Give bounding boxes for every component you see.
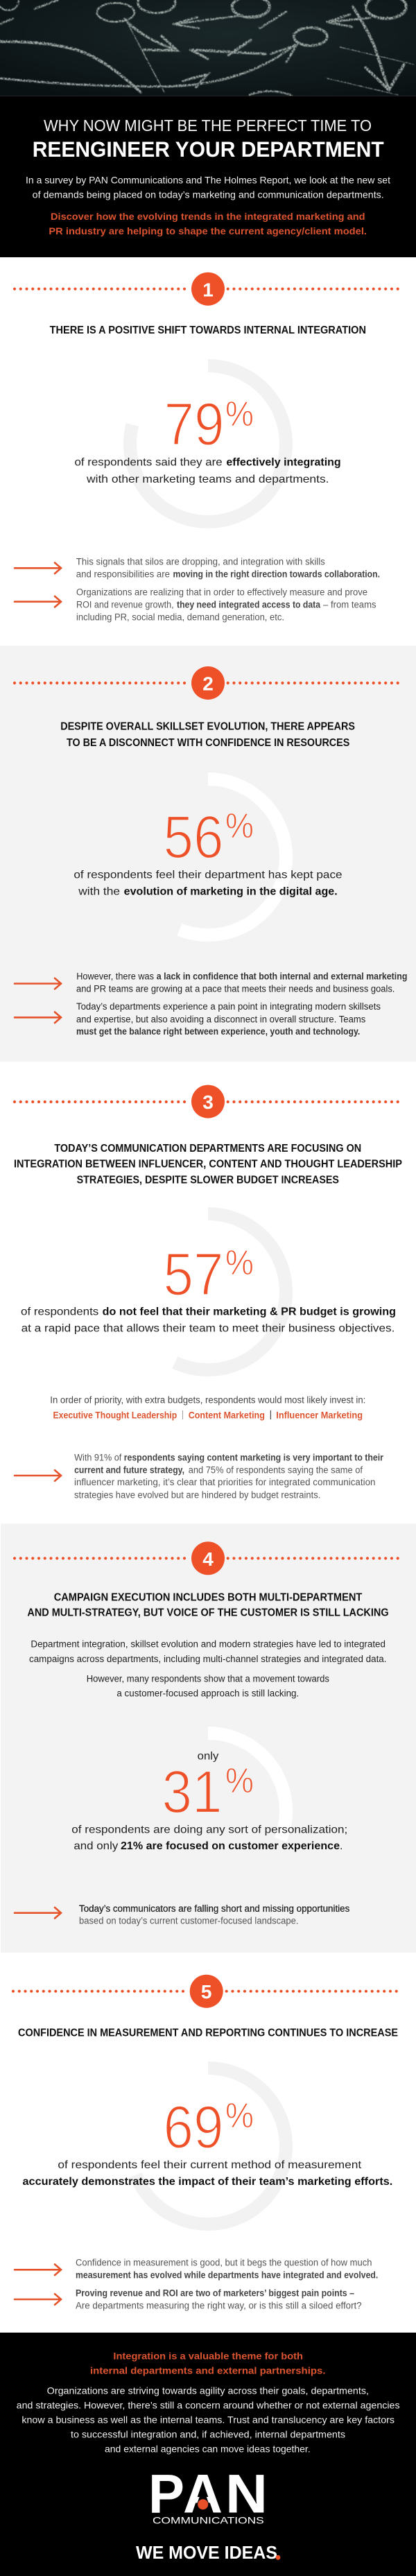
stat description: and only <box>73 1840 118 1852</box>
bullet text: ROI and revenue growth, <box>76 599 174 610</box>
intro text: of demands being placed on today’s marketing and communication departments. <box>33 189 384 200</box>
ring chart 31% <box>130 1734 286 1889</box>
stat description: of respondents said they are <box>75 457 223 469</box>
stat description: with other marketing teams and departments. <box>86 474 329 485</box>
orange intro callout <box>49 211 367 236</box>
ring chart 79% <box>130 366 286 521</box>
bullet text: Today’s departments experience a pain point in integrating modern skillsets <box>76 1001 381 1012</box>
bullet text <box>76 1001 381 1037</box>
stat description <box>71 1824 347 1852</box>
footer orange heading: internal departments and external partnerships. <box>90 2365 326 2376</box>
footer text: and external agencies can move ideas together. <box>105 2443 311 2454</box>
heading: INTEGRATION BETWEEN INFLUENCER, CONTENT AND THOUGHT LEADERSHIP <box>14 1159 402 1170</box>
bullet text: strategies have evolved but are hindered by budget restraints. <box>74 1489 320 1500</box>
bullet text: Proving revenue and ROI are two of marketers’ biggest pain points – <box>76 2288 354 2299</box>
stat description: of respondents feel their current method of measurement <box>58 2159 362 2171</box>
arrow <box>15 596 61 607</box>
heading: TO BE A DISCONNECT WITH CONFIDENCE IN RESOURCES <box>67 737 349 749</box>
heading: CAMPAIGN EXECUTION INCLUDES BOTH MULTI-DEPARTMENT <box>54 1592 363 1604</box>
arrow <box>15 2294 61 2305</box>
logo: PAN Communications <box>148 2462 268 2525</box>
bullet text <box>76 971 407 994</box>
intro text: a customer-focused approach is still lacking. <box>116 1688 299 1699</box>
intro text <box>26 174 390 200</box>
arrow <box>15 1470 61 1481</box>
stat 79%: 79 <box>164 391 225 458</box>
heading: AND MULTI-STRATEGY, BUT VOICE OF THE CUSTOMER IS STILL LACKING <box>27 1607 389 1618</box>
bullet text: influencer marketing, it’s clear that priorities for integrated communication <box>74 1477 376 1487</box>
stat 57%: % <box>225 1243 254 1282</box>
bullet text: Are departments measuring the right way, or is this still a siloed effort? <box>76 2300 362 2310</box>
stat description <box>75 457 341 485</box>
heading: STRATEGIES, DESPITE SLOWER BUDGET INCREASES <box>77 1175 339 1186</box>
stat description: do not feel that their marketing & PR budget is growing <box>103 1306 396 1318</box>
stat description <box>22 2159 392 2188</box>
stat description: at a rapid pace that allows their team to meet their business objectives. <box>21 1322 395 1334</box>
bullet text: must get the balance right between experience, youth and technology. <box>76 1026 360 1037</box>
heading: THERE IS A POSITIVE SHIFT TOWARDS INTERNAL INTEGRATION <box>50 325 366 336</box>
investment priorities: In order of priority, with extra budgets, respondents would most likely invest in: <box>50 1395 365 1406</box>
heading: CONFIDENCE IN MEASUREMENT AND REPORTING CONTINUES TO INCREASE <box>18 2028 398 2039</box>
investment priorities <box>50 1395 365 1421</box>
intro text <box>29 1639 387 1699</box>
arrow <box>15 563 61 573</box>
bullet text: Today’s communicators are falling short and missing opportunities <box>79 1903 350 1914</box>
investment priorities: Influencer Marketing <box>276 1410 363 1421</box>
intro text: However, many respondents show that a movement towards <box>87 1674 329 1684</box>
intro text: In a survey by PAN Communications and The Holmes Report, we look at the new set <box>26 174 390 185</box>
bullet text: based on today’s current customer-focused landscape. <box>79 1915 298 1926</box>
arrow <box>15 1012 61 1023</box>
number badge 1: 1 <box>202 279 214 300</box>
number badge 5: 5 <box>201 1981 211 2003</box>
bullet text: Confidence in measurement is good, but it begs the question of how much <box>76 2257 372 2267</box>
panel: footer <box>0 2333 416 2576</box>
arrow <box>15 2265 61 2275</box>
stat 69%: % <box>225 2095 254 2135</box>
heading <box>14 1143 402 1186</box>
bullet text: – from teams <box>323 599 376 610</box>
hero image: chalkboard play diagram <box>0 0 416 96</box>
footer text: and strategies. However, there’s still a concern around whether or not external agencies <box>17 2399 400 2410</box>
number badge 3: 3 <box>202 1091 214 1113</box>
number badge 2: 2 <box>202 673 214 695</box>
bullet text: measurement has evolved while departments have integrated and evolved. <box>76 2270 378 2280</box>
number badge 3 <box>15 1085 401 1118</box>
bullet text <box>79 1903 350 1926</box>
stat 31%: % <box>225 1761 254 1800</box>
arrow <box>15 978 61 989</box>
stat description <box>73 870 343 897</box>
intro text: campaigns across departments, including multi-channel strategies and integrated data. <box>29 1654 387 1664</box>
heading <box>27 1592 389 1618</box>
ring chart 69% <box>130 2068 286 2224</box>
stat 79%: % <box>225 394 254 433</box>
stat 56%: % <box>225 806 254 845</box>
tagline: WE MOVE IDEAS <box>136 2543 277 2563</box>
orange intro callout: Discover how the evolving trends in the integrated marketing and <box>51 211 365 222</box>
stat description: of respondents are doing any sort of personalization; <box>71 1824 347 1836</box>
number badge 4 <box>15 1541 401 1575</box>
number badge 4: 4 <box>202 1548 214 1570</box>
number badge 2 <box>15 666 401 700</box>
bullet text: and PR teams are growing at a pace that meets their needs and business goals. <box>76 983 395 994</box>
stat description: with the <box>78 886 120 897</box>
bullet text <box>76 2288 362 2310</box>
only label: only <box>198 1750 218 1763</box>
logo: PAN Communications: A <box>183 2462 223 2524</box>
bullet text: moving in the right direction towards collaboration. <box>173 569 380 579</box>
ring chart 57% <box>130 1213 286 1370</box>
footer text: Organizations are striving towards agility across their goals, departments, <box>47 2385 369 2396</box>
logo: PAN Communications: COMMUNICATIONS <box>153 2514 264 2525</box>
bullet text <box>76 2257 378 2280</box>
bullet text <box>76 556 380 579</box>
heading: TODAY’S COMMUNICATION DEPARTMENTS ARE FOCUSING ON <box>54 1143 361 1155</box>
bullet text: Organizations are realizing that in order to effectively measure and prove <box>76 587 367 597</box>
stat description: accurately demonstrates the impact of their team’s marketing efforts. <box>22 2176 392 2188</box>
bullet text: and expertise, but also avoiding a disconnect in overall structure. Teams <box>76 1014 366 1024</box>
bullet text <box>74 1452 384 1500</box>
stat 57%: 57 <box>164 1241 223 1308</box>
panel: section 1 <box>0 257 416 646</box>
intro text: Department integration, skillset evolution and modern strategies have led to integrated <box>31 1639 385 1649</box>
title: REENGINEER YOUR DEPARTMENT <box>33 137 384 162</box>
bullet text: and responsibilities are <box>76 569 170 579</box>
ring chart 56% <box>130 779 286 935</box>
stat description: of respondents <box>21 1306 98 1318</box>
bullet text: This signals that silos are dropping, and integration with skills <box>76 556 325 567</box>
footer orange heading: Integration is a valuable theme for both <box>113 2350 303 2361</box>
heading: DESPITE OVERALL SKILLSET EVOLUTION, THERE APPEARS <box>60 721 355 733</box>
logo: PAN Communications: P <box>148 2462 184 2524</box>
arrow <box>15 1908 61 1918</box>
orange intro callout: PR industry are helping to shape the current agency/client model. <box>49 225 367 236</box>
bullet text: current and future strategy, <box>74 1465 184 1476</box>
bullet text: including PR, social media, demand generation, etc. <box>76 612 284 622</box>
footer text: to successful integration and, if achieved, internal departments <box>71 2428 345 2439</box>
stat description: 21% are focused on customer experience <box>121 1840 340 1852</box>
number badge 1 <box>15 273 401 306</box>
bullet text: they need integrated access to data <box>177 599 320 610</box>
panel: section 4 <box>1 1524 416 1953</box>
number badge 5 <box>13 1975 400 2008</box>
stat 31%: 31 <box>162 1758 222 1826</box>
stat description: evolution of marketing in the digital age. <box>124 886 338 897</box>
bullet text: However, there was <box>76 971 154 982</box>
title <box>33 116 384 162</box>
footer text: know a business as well as the internal teams. Trust and translucency are key factors <box>21 2414 395 2425</box>
stat description: . <box>340 1840 343 1852</box>
logo: PAN Communications: N <box>225 2462 268 2524</box>
stat description: effectively integrating <box>226 457 341 469</box>
bullet text: respondents saying content marketing is very important to their <box>124 1452 384 1462</box>
heading <box>60 721 355 749</box>
stat 69%: 69 <box>164 2093 223 2161</box>
title: WHY NOW MIGHT BE THE PERFECT TIME TO <box>44 116 372 135</box>
footer text <box>17 2385 400 2454</box>
panel: section 2 <box>0 646 416 1062</box>
bullet text: With 91% of <box>74 1452 122 1462</box>
stat 56%: 56 <box>164 804 223 871</box>
investment priorities: Content Marketing <box>189 1410 265 1421</box>
footer orange heading <box>90 2350 326 2376</box>
stat description <box>21 1306 396 1334</box>
stat description: of respondents feel their department has kept pace <box>73 870 343 881</box>
header panel <box>0 96 416 257</box>
bullet text: and 75% of respondents saying the same of <box>189 1465 363 1476</box>
panel: section 5 <box>0 1953 416 2333</box>
bullet text <box>76 587 376 622</box>
investment priorities: Executive Thought Leadership <box>53 1410 177 1421</box>
panel: section 3 <box>0 1062 416 1524</box>
